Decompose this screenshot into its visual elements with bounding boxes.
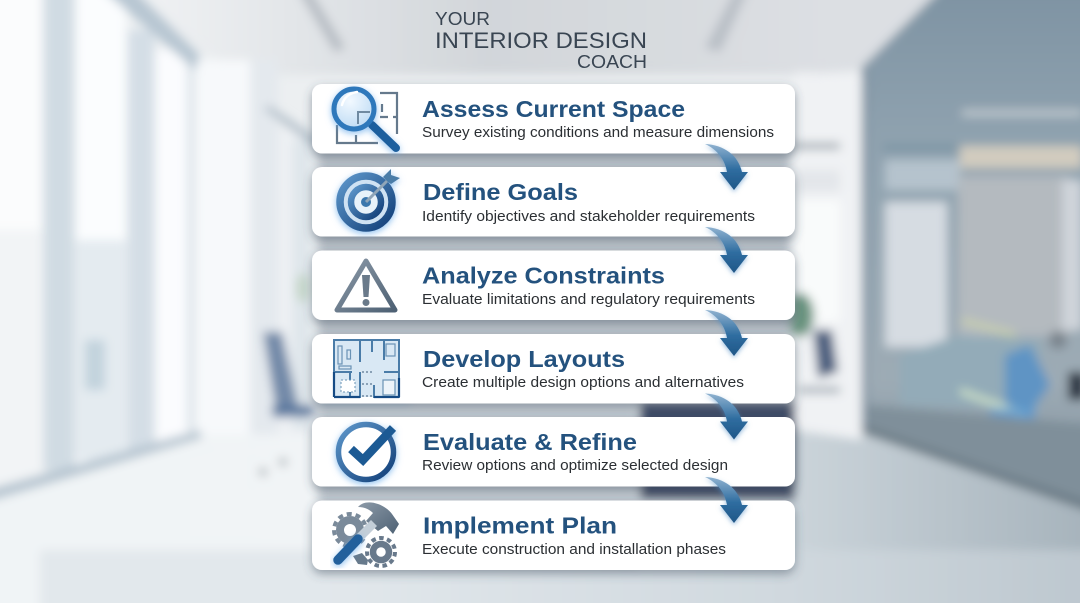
icon: target with arrow <box>340 169 400 228</box>
icon: hammer and gears <box>334 502 399 566</box>
heading: assess current space: Assess Current Space <box>422 96 685 122</box>
icon: magnifier over floor plan <box>334 89 397 148</box>
text: analyze description: Evaluate limitations and regulatory requirements <box>422 292 755 308</box>
heading: develop layouts: Develop Layouts <box>423 346 625 372</box>
text: implement description: Execute construction and installation phases <box>422 542 726 558</box>
arrow: step 4 to 5 <box>705 394 748 440</box>
background: gaps behind cards <box>318 92 790 397</box>
panel: step 2 define goals <box>312 167 795 236</box>
arrow: step 2 to 3 <box>705 227 748 273</box>
panel: step 5 evaluate and refine <box>312 417 795 486</box>
background: centre dark furniture <box>320 395 795 500</box>
icon: floor plan <box>334 340 399 397</box>
panel: step 3 analyze constraints <box>312 250 795 320</box>
arrow: step 5 to 6 <box>705 477 748 523</box>
title: COACH <box>577 52 647 72</box>
heading: define goals: Define Goals <box>423 179 578 205</box>
background: glass wall <box>862 0 1080 515</box>
panel: step 6 implement plan <box>312 500 795 570</box>
background: left windows <box>0 0 320 510</box>
title <box>435 9 647 72</box>
title: INTERIOR DESIGN <box>435 28 647 53</box>
text: evaluate description: Review options and optimize selected design <box>422 458 728 474</box>
arrow: step 3 to 4 <box>705 310 748 356</box>
background: ceiling <box>100 0 960 75</box>
background: right wall <box>786 72 862 440</box>
heading: analyze constraints: Analyze Constraints <box>422 262 665 288</box>
arrow: step 1 to 2 <box>705 144 748 190</box>
background: ceiling streaks <box>298 0 748 52</box>
text: assess description: Survey existing conditions and measure dimensions <box>422 125 774 141</box>
heading: implement plan: Implement Plan <box>423 512 617 538</box>
background: plant and chair left <box>259 273 314 476</box>
panel: step 4 develop layouts <box>312 334 795 404</box>
heading: evaluate and refine: Evaluate & Refine <box>423 429 637 455</box>
text: develop description: Create multiple design options and alternatives <box>422 375 744 391</box>
text: define description: Identify objectives and stakeholder requirements <box>422 209 755 225</box>
panel: step 1 assess current space <box>312 84 795 154</box>
background: floor <box>0 430 1080 603</box>
title: YOUR <box>435 9 490 29</box>
icon: warning triangle <box>337 261 395 310</box>
icon: check mark in circle <box>338 424 394 480</box>
